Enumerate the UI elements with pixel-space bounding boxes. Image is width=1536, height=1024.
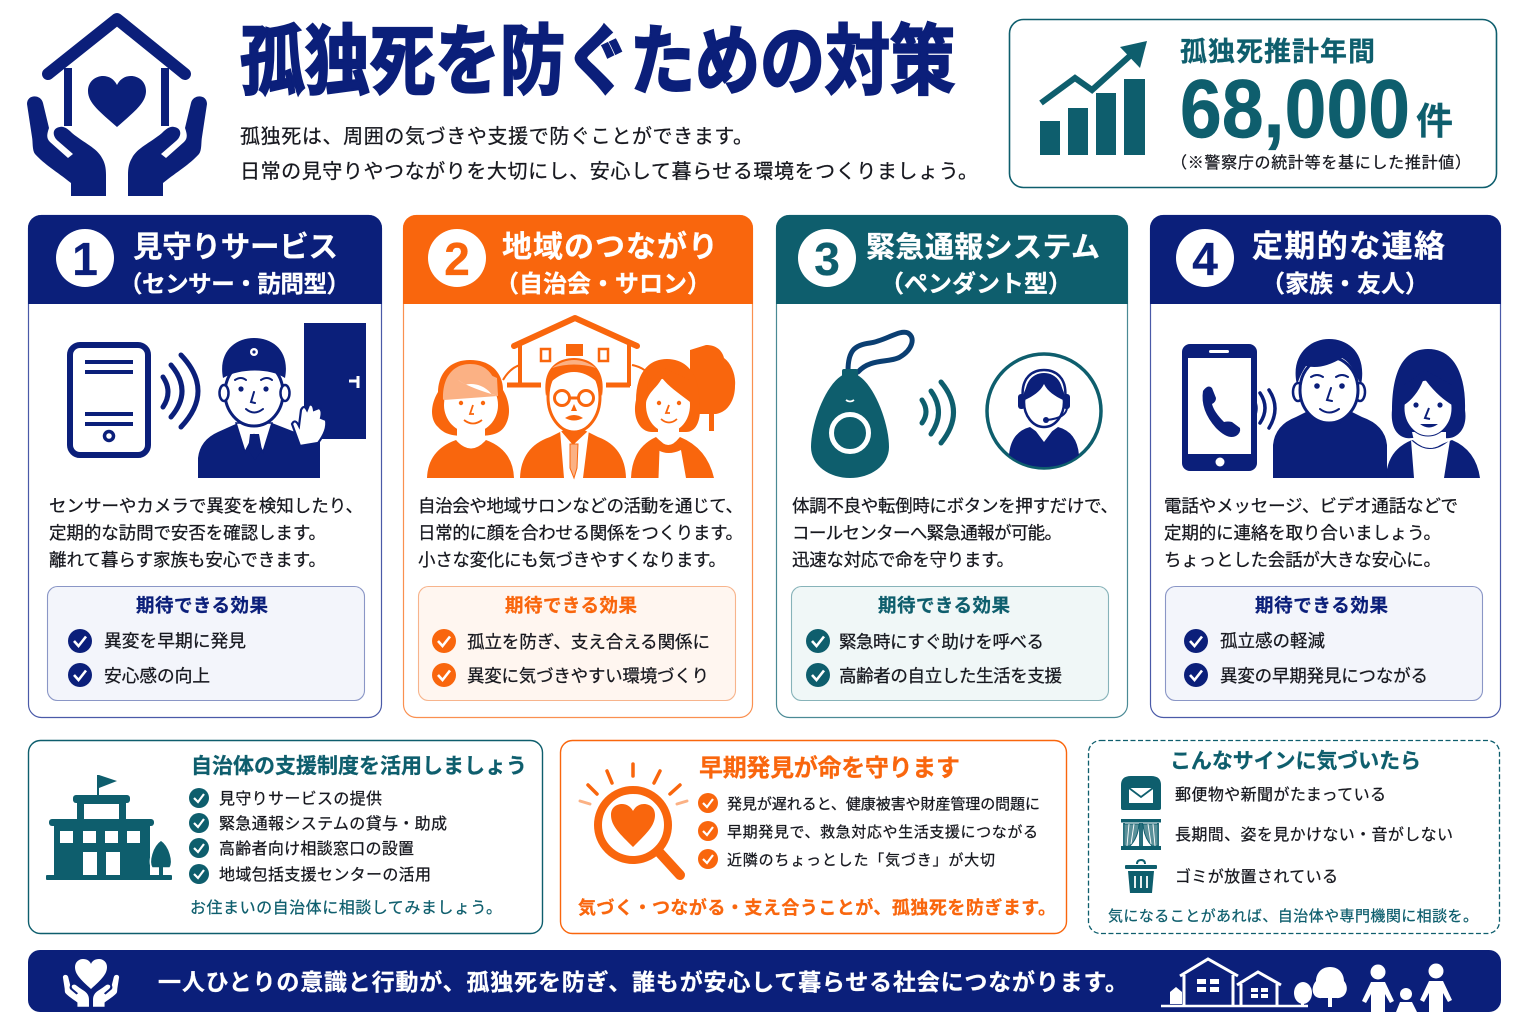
heading: （家族・友人） (1261, 271, 1429, 298)
check list (189, 788, 447, 884)
check item: 孤立感の軽減 (1220, 631, 1326, 651)
heading (866, 231, 1100, 298)
description (1164, 496, 1458, 570)
panel: card 3 emergency system (776, 215, 1128, 718)
panel: expected effects 4: 期待できる効果 (1255, 595, 1388, 616)
heading: 早期発見が命を守ります (699, 754, 960, 782)
panel: early detection (560, 740, 1066, 934)
panel: expected effects 3 (792, 586, 1108, 700)
number badge 1: 1 (72, 233, 98, 285)
panel: expected effects 1 (48, 586, 364, 700)
sign: uncollected rubbish: ゴミが放置されている (1175, 867, 1338, 886)
heading: 地域のつながり (502, 230, 718, 264)
heading (1252, 229, 1445, 298)
statistic value: 68,000 (1180, 63, 1410, 155)
footer note: 気になることがあれば、自治体や専門機関に相談を。 (1108, 908, 1478, 925)
check list: 高齢者向け相談窓口の設置 (219, 840, 414, 858)
panel: card 4 regular contact (1150, 215, 1501, 718)
check list: 近隣のちょっとした「気づき」が大切 (727, 852, 995, 869)
illustration: pendant alarm and operator (811, 332, 1101, 478)
tree (690, 345, 735, 431)
illustration: tablet, waves, visiting staff (70, 323, 366, 478)
message: 一人ひとりの意識と行動が、孤独死を防ぎ、誰もが安心して暮らせる社会につながります。 (158, 969, 1128, 995)
heading (495, 230, 718, 298)
number badge 2 (428, 229, 486, 287)
heading: 見守りサービス (133, 231, 338, 264)
description: 定期的に連絡を取り合いましょう。 (1164, 523, 1441, 543)
statistic label: 孤独死推計年間 (1180, 37, 1375, 67)
sign: uncollected rubbish (1125, 860, 1338, 893)
description: 定期的な訪問で安否を確認します。 (49, 523, 326, 543)
heading: （自治会・サロン） (495, 271, 711, 298)
heading: （ペンダント型） (880, 270, 1072, 298)
icon: rising bar chart (1040, 41, 1147, 155)
intro text (240, 125, 978, 183)
description: 日常的に顔を合わせる関係をつくります。 (418, 523, 743, 543)
description (418, 496, 743, 570)
heading: 緊急通報システム (866, 231, 1100, 264)
icon: heart and hands (63, 959, 119, 1007)
check item: 異変に気づきやすい環境づくり (467, 666, 709, 686)
icon: magnifier with heart (580, 764, 687, 875)
check list: 見守りサービスの提供 (219, 790, 382, 808)
heading: （センサー・訪問型） (119, 271, 350, 297)
man (1273, 339, 1387, 478)
description: ちょっとした会話が大きな安心に。 (1164, 550, 1441, 570)
sign: mail piling up: 郵便物や新聞がたまっている (1175, 786, 1386, 804)
description: センサーやカメラで異変を検知したり、 (49, 496, 363, 516)
centre neighbour (520, 358, 626, 478)
icon: house with heart and hands (27, 19, 207, 196)
panel: expected effects 2 (418, 586, 736, 700)
number badge 2: 2 (444, 233, 470, 285)
heading: こんなサインに気づいたら (1170, 750, 1421, 773)
statistic note: （※警察庁の統計等を基にした推計値） (1171, 154, 1471, 172)
description: 小さな変化にも気づきやすくなります。 (418, 550, 726, 570)
call to action: 気づく・つながる・支え合うことが、孤独死を防ぎます。 (578, 897, 1056, 918)
sign: closed curtains: 長期間、姿を見かけない・音がしない (1175, 826, 1453, 844)
check list: 地域包括支援センターの活用 (219, 866, 431, 884)
check list: 早期発見で、救急対応や生活支援につながる (727, 824, 1038, 841)
check list: 発見が遅れると、健康被害や財産管理の問題に (727, 795, 1040, 813)
illustration: neighbours and community hall (427, 318, 735, 478)
description: 電話やメッセージ、ビデオ通話などで (1164, 496, 1458, 516)
description (49, 496, 363, 570)
title: 孤独死を防ぐための対策 (240, 20, 955, 105)
description: 体調不良や転倒時にボタンを押すだけで、 (792, 496, 1118, 516)
panel: expected effects 4 (1166, 586, 1482, 700)
number badge 4: 4 (1192, 233, 1218, 285)
check item: 異変の早期発見につながる (1220, 666, 1428, 686)
check item: 緊急時にすぐ助けを呼べる (839, 632, 1044, 652)
sign: closed curtains (1121, 819, 1453, 850)
number badge 3 (798, 229, 856, 287)
check item (68, 629, 246, 653)
panel: expected effects 3: 期待できる効果 (878, 595, 1010, 616)
panel: expected effects 1: 期待できる効果 (136, 595, 268, 616)
intro text: 孤独死は、周囲の気づきや支援で防ぐことができます。 (240, 125, 753, 148)
heading: 定期的な連絡 (1252, 229, 1445, 264)
right neighbour (631, 359, 714, 478)
check list (698, 793, 1040, 869)
sign: mail piling up (1121, 776, 1386, 810)
check list: 緊急通報システムの貸与・助成 (219, 814, 447, 833)
check item: 安心感の向上 (104, 666, 210, 686)
panel: warning signs (1088, 740, 1500, 934)
panel: statistic (1010, 20, 1496, 188)
check item (68, 663, 210, 687)
statistic value: 件 (1416, 101, 1453, 142)
panel: card 2 community connection (403, 215, 753, 718)
panel: card 1 monitoring service (28, 215, 382, 718)
check item: 高齢者の自立した生活を支援 (839, 666, 1062, 686)
description (792, 496, 1118, 570)
number badge 3: 3 (814, 233, 840, 285)
check item (1184, 629, 1326, 653)
banner: closing message (28, 950, 1501, 1012)
description: コールセンターへ緊急通報が可能。 (792, 523, 1062, 543)
left neighbour (427, 360, 514, 478)
panel: municipal support (28, 740, 542, 934)
number badge 4 (1176, 229, 1234, 287)
icon: community scene (1161, 959, 1452, 1012)
icon: municipal building (46, 775, 172, 880)
heading: 自治体の支援制度を活用しましょう (191, 755, 527, 778)
intro text: 日常の見守りやつながりを大切にし、安心して暮らせる環境をつくりましょう。 (240, 160, 978, 183)
description: 離れて暮らす家族も安心できます。 (49, 550, 326, 570)
illustration: smartphone and family (1182, 339, 1480, 478)
panel: expected effects 2: 期待できる効果 (505, 595, 637, 616)
check item: 孤立を防ぎ、支え合える関係に (467, 632, 710, 652)
footer note: お住まいの自治体に相談してみましょう。 (190, 899, 502, 917)
check item: 異変を早期に発見 (104, 631, 246, 651)
description: 自治会や地域サロンなどの活動を通じて、 (418, 496, 743, 516)
description: 迅速な対応で命を守ります。 (792, 550, 1014, 570)
heading (119, 231, 350, 297)
woman (1386, 349, 1480, 478)
number badge 1 (56, 229, 114, 287)
